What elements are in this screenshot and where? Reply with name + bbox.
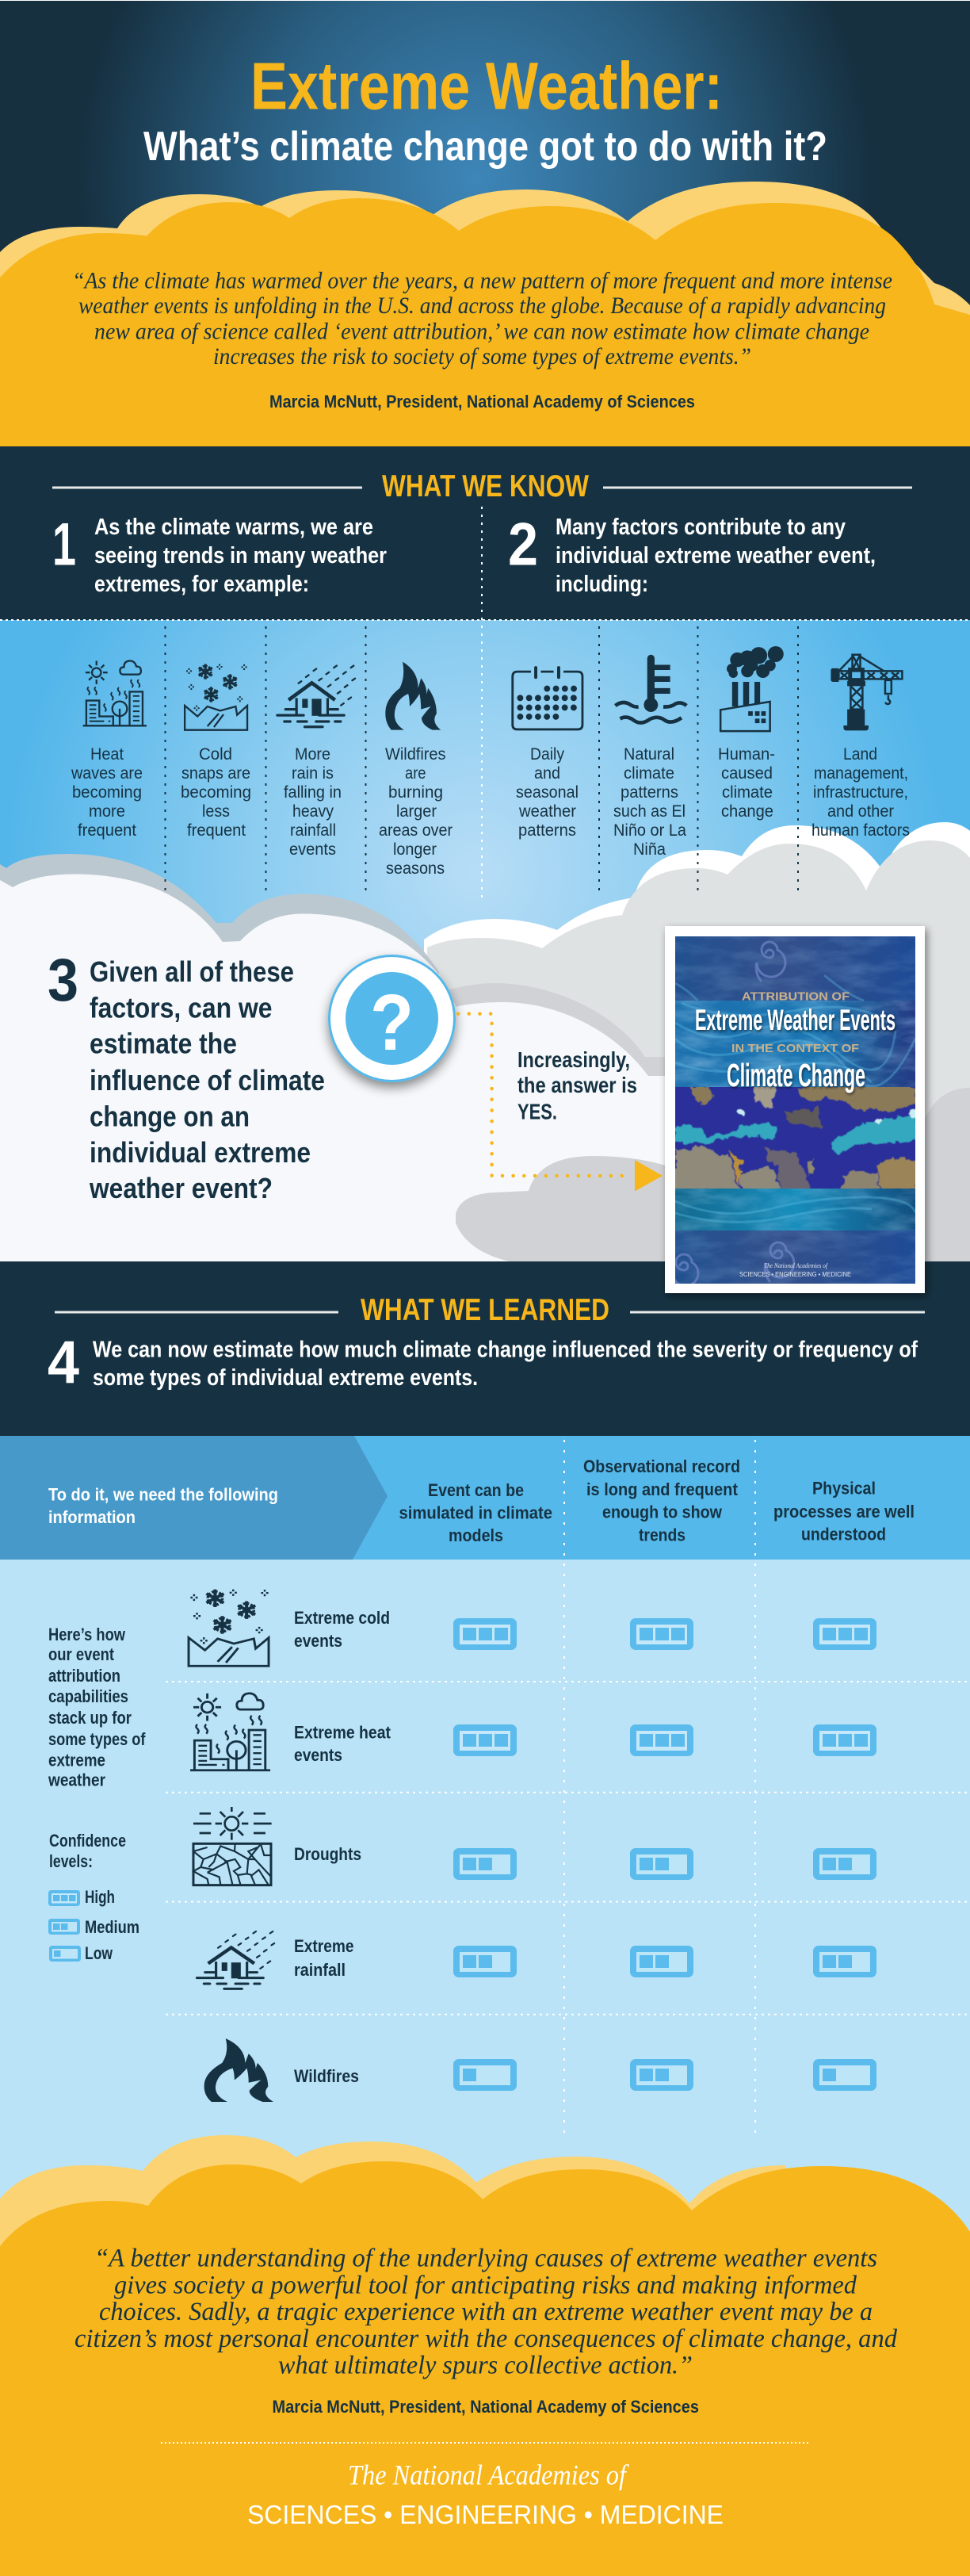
row: extreme heat: events xyxy=(294,1745,342,1765)
item 3 question: weather event? xyxy=(89,1172,273,1204)
label: natural patterns: patterns xyxy=(621,783,678,802)
label: land management xyxy=(812,745,910,840)
column heading: observational record: enough to show xyxy=(602,1502,723,1522)
table header band xyxy=(0,1436,970,1560)
heading: what we learned: WHAT WE LEARNED xyxy=(361,1293,609,1327)
label: land management: management, xyxy=(814,764,908,783)
label: wildfires: larger xyxy=(396,802,437,821)
answer text: the answer is xyxy=(517,1073,637,1097)
label: natural patterns: Niño or La xyxy=(613,821,686,840)
label: land management: infrastructure, xyxy=(813,783,908,802)
bottom quote: citizen’s most personal encounter with the consequences of climate change, and xyxy=(74,2325,897,2353)
label: heat waves: frequent xyxy=(78,821,136,840)
top quote attribution: Marcia McNutt, President, National Academy of Sciences xyxy=(269,392,695,411)
row: extreme rainfall: Extreme xyxy=(294,1936,353,1956)
intro text: extreme xyxy=(48,1751,105,1770)
bottom quote xyxy=(74,2245,897,2380)
report cover: IN THE CONTEXT OF xyxy=(731,1042,859,1055)
label: land management: and other xyxy=(827,802,894,821)
column heading: simulated: Event can be xyxy=(428,1480,524,1500)
item 1: seeing trends in many weather xyxy=(94,543,387,568)
item 2: 2 xyxy=(508,511,538,579)
label: heavy rain: falling in xyxy=(284,783,342,802)
label: heavy rain xyxy=(284,745,342,859)
heading: what we know xyxy=(52,469,912,503)
row: wildfires: Wildfires xyxy=(294,2066,359,2086)
heading: what we learned xyxy=(55,1293,925,1327)
icon: wildfire xyxy=(385,662,441,730)
icon: calendar xyxy=(513,668,582,729)
label: cold snaps: snaps are xyxy=(181,764,250,783)
item 3 question xyxy=(48,947,325,1204)
legend: confidence levels: Low xyxy=(85,1943,113,1963)
item 3 question: estimate the xyxy=(90,1028,237,1060)
intro text: Here’s how xyxy=(48,1625,126,1644)
item 3 question: Given all of these xyxy=(90,955,294,988)
label: wildfires: are xyxy=(405,764,426,783)
icon: thermometer and water xyxy=(615,655,686,723)
top quote: “As the climate has warmed over the years, a new pattern of more frequent and more intense xyxy=(72,268,892,293)
label: human-caused change: Human- xyxy=(718,745,775,764)
legend: confidence levels xyxy=(48,1831,139,1963)
answer text: Increasingly, xyxy=(517,1047,630,1072)
top quote: increases the risk to society of some types of extreme events.” xyxy=(213,343,751,369)
report cover: SCIENCES • ENGINEERING • MEDICINE xyxy=(739,1270,851,1278)
item 3 question: individual extreme xyxy=(90,1136,311,1169)
row: extreme cold: events xyxy=(294,1631,342,1651)
lower grey cloud xyxy=(455,1156,666,1265)
item 3 question: change on an xyxy=(90,1100,250,1133)
label: wildfires: seasons xyxy=(386,859,445,878)
item 1: extremes, for example: xyxy=(94,572,309,597)
panel: factors band xyxy=(0,620,970,953)
label: natural patterns: Natural xyxy=(624,745,674,764)
legend: confidence levels: High xyxy=(85,1887,115,1907)
bottom quote: what ultimately spurs collective action.” xyxy=(278,2352,693,2380)
title: Extreme Weather: xyxy=(250,49,723,124)
mid grey cloud arc xyxy=(440,983,666,1261)
bottom quote: “A better understanding of the underlying causes of extreme weather events xyxy=(94,2245,877,2273)
legend: confidence levels: levels: xyxy=(49,1851,93,1871)
label: daily patterns: Daily xyxy=(530,745,564,764)
icon: heavy rain xyxy=(277,666,355,727)
top quote: weather events is unfolding in the U.S. and across the globe. Because of a rapidly advancing xyxy=(78,293,886,319)
bottom quote: gives society a powerful tool for anticipating risks and making informed xyxy=(114,2271,857,2299)
grey cloud right of book xyxy=(925,1088,970,1265)
intro text: attribution xyxy=(48,1666,120,1686)
column heading: physical processes: understood xyxy=(801,1524,886,1544)
row: extreme cold xyxy=(189,1590,876,1666)
item 1: 1 xyxy=(52,511,76,579)
logo: national academies: The National Academies of xyxy=(348,2459,629,2491)
arrow: dotted path to report xyxy=(458,1014,663,1191)
icon: question mark circle: ? xyxy=(370,978,414,1067)
label: heat waves: Heat xyxy=(90,745,124,764)
item 4: some types of individual extreme events. xyxy=(93,1365,478,1391)
row: extreme cold: Extreme cold xyxy=(294,1608,390,1628)
answer text: YES. xyxy=(517,1099,557,1124)
row: droughts xyxy=(193,1807,876,1885)
icon: cold snaps xyxy=(185,664,247,730)
top quote: new area of science called ‘event attribution,’ we can now estimate how climate change xyxy=(94,319,869,344)
icon: factory xyxy=(720,646,784,731)
label: natural patterns: climate xyxy=(624,764,674,783)
report cover: ATTRIBUTION OF xyxy=(742,989,850,1004)
item 4 xyxy=(48,1329,918,1396)
label: human-caused change: climate xyxy=(722,783,773,802)
label: cold snaps: less xyxy=(202,802,230,821)
item 1: As the climate warms, we are xyxy=(94,515,373,540)
right cloud back layer xyxy=(424,822,970,1031)
icon: construction crane xyxy=(831,655,902,730)
icon: heat waves xyxy=(83,660,147,725)
item 4: 4 xyxy=(48,1329,79,1396)
item 3 question: influence of climate xyxy=(90,1064,325,1097)
label: human-caused change: change xyxy=(721,802,773,821)
item 3 question: 3 xyxy=(48,947,78,1014)
table header arrow: information xyxy=(48,1507,136,1527)
label: daily patterns: and xyxy=(534,764,560,783)
label: land management: Land xyxy=(843,745,877,764)
item 1 xyxy=(52,511,387,597)
row: extreme rainfall xyxy=(197,1931,876,1988)
label: wildfires xyxy=(379,745,453,878)
column heading: physical processes: Physical xyxy=(812,1479,876,1499)
row: extreme rainfall: rainfall xyxy=(294,1960,346,1980)
label: wildfires: areas over xyxy=(379,821,453,840)
report cover: Climate Change xyxy=(727,1057,865,1093)
label: wildfires: longer xyxy=(393,840,437,859)
column heading: simulated: simulated in climate xyxy=(399,1503,552,1523)
label: daily patterns: patterns xyxy=(518,821,576,840)
label: natural patterns: such as El xyxy=(613,802,685,821)
row: wildfires xyxy=(204,2038,876,2102)
item 2: individual extreme weather event, xyxy=(556,543,876,568)
column heading: observational record: trends xyxy=(639,1525,685,1545)
column heading: simulated xyxy=(399,1480,552,1545)
label: wildfires: burning xyxy=(388,783,443,802)
label: heat waves xyxy=(71,745,143,840)
label: heat waves: more xyxy=(89,802,125,821)
label: heavy rain: events xyxy=(289,840,336,859)
right cloud grey layer xyxy=(427,840,970,1265)
label: daily patterns: weather xyxy=(518,802,576,821)
column heading: physical processes: processes are well xyxy=(773,1502,915,1521)
left cloud back layer xyxy=(0,854,439,1031)
intro text: our event xyxy=(48,1644,115,1664)
table header arrow xyxy=(0,1436,388,1560)
item 3 question: factors, can we xyxy=(90,992,273,1024)
column heading: observational record: Observational record xyxy=(583,1456,740,1476)
label: natural patterns: Niña xyxy=(633,840,666,859)
label: heavy rain: rainfall xyxy=(290,821,336,840)
label: natural patterns xyxy=(613,745,686,859)
label: heavy rain: heavy xyxy=(292,802,334,821)
column heading: observational record: is long and frequent xyxy=(586,1479,739,1499)
intro text: some types of xyxy=(48,1729,146,1749)
label: cold snaps xyxy=(181,745,251,840)
item 2: Many factors contribute to any xyxy=(556,515,846,540)
label: heat waves: waves are xyxy=(71,764,143,783)
label: heavy rain: More xyxy=(295,745,330,764)
logo: national academies xyxy=(247,2459,724,2529)
row: extreme heat: Extreme heat xyxy=(294,1722,391,1743)
intro text: weather xyxy=(48,1770,105,1790)
label: cold snaps: frequent xyxy=(187,821,246,840)
label: daily patterns xyxy=(516,745,579,840)
title xyxy=(143,49,827,170)
item 2: including: xyxy=(556,572,648,597)
panel: what we learned xyxy=(0,1261,970,1436)
report cover: The National Academies of xyxy=(764,1262,829,1269)
icon: question mark circle xyxy=(328,955,456,1082)
row: droughts: Droughts xyxy=(294,1844,361,1864)
row: extreme heat xyxy=(190,1694,876,1770)
header background xyxy=(0,1,970,318)
label: human-caused change xyxy=(718,745,775,821)
label: land management: human factors xyxy=(812,821,910,840)
label: cold snaps: Cold xyxy=(199,745,232,764)
top quote xyxy=(72,268,892,369)
label: heat waves: becoming xyxy=(72,783,142,802)
item 2 xyxy=(508,511,876,597)
label: cold snaps: becoming xyxy=(181,783,251,802)
panel: what we know xyxy=(0,446,970,620)
label: wildfires: Wildfires xyxy=(385,745,445,764)
column heading: simulated: models xyxy=(449,1525,503,1545)
table body xyxy=(0,1560,970,2299)
table header arrow: To do it, we need the following xyxy=(48,1484,278,1505)
report cover xyxy=(665,926,925,1293)
white cloud under answer xyxy=(455,1002,666,1265)
label: heavy rain: rain is xyxy=(292,764,334,783)
bottom quote attribution: Marcia McNutt, President, National Academy of Sciences xyxy=(273,2397,699,2417)
legend: confidence levels: Confidence xyxy=(49,1831,126,1851)
bottom yellow cloud xyxy=(0,2135,970,2576)
left cloud front layer xyxy=(0,874,456,1265)
answer text xyxy=(517,1047,637,1124)
heading: what we know: WHAT WE KNOW xyxy=(382,469,589,503)
label: human-caused change: caused xyxy=(721,764,773,783)
intro text: stack up for xyxy=(48,1708,132,1728)
column heading: observational record xyxy=(583,1456,740,1545)
column heading: physical processes xyxy=(773,1479,915,1544)
logo: national academies: SCIENCES • ENGINEERING • MEDICINE xyxy=(247,2500,724,2529)
label: daily patterns: seasonal xyxy=(516,783,579,802)
bottom quote: choices. Sadly, a tragic experience with an extreme weather event may be a xyxy=(99,2298,873,2326)
legend: confidence levels: Medium xyxy=(85,1917,139,1937)
title: What’s climate change got to do with it? xyxy=(143,124,827,170)
top yellow cloud xyxy=(0,182,970,446)
intro text xyxy=(48,1625,146,1790)
intro text: capabilities xyxy=(48,1686,128,1706)
